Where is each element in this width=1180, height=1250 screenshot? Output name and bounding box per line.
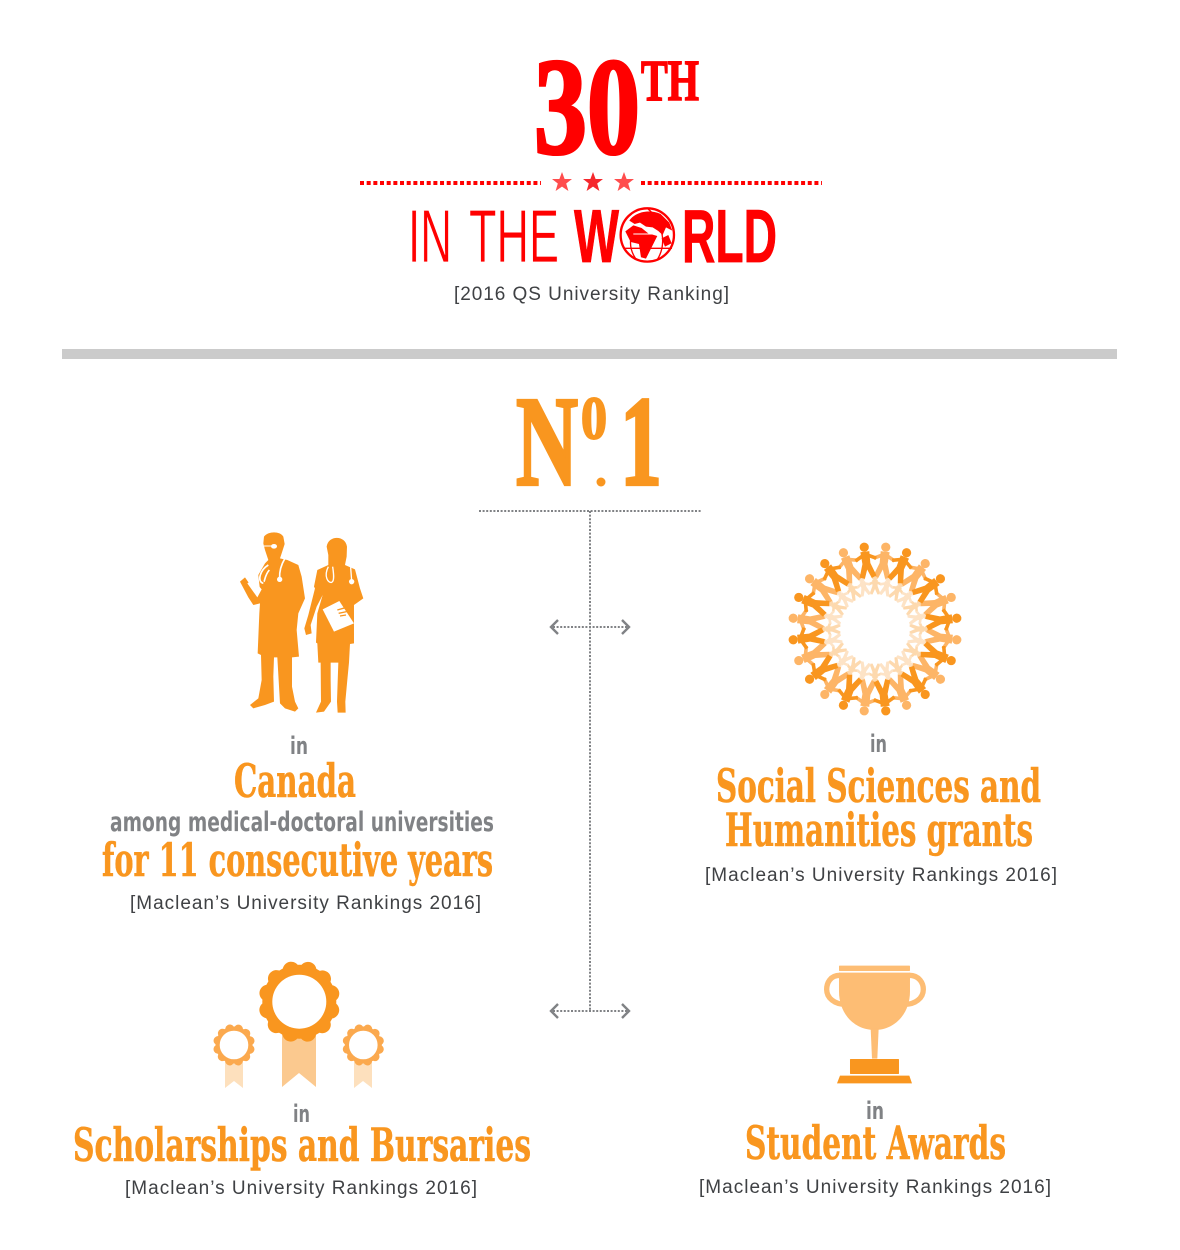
heading: Canada: Canada	[234, 754, 356, 808]
source note: [Maclean’s University Rankings 2016]	[125, 1178, 477, 1199]
heading: IN: IN	[408, 194, 452, 278]
source note: [Maclean’s University Rankings 2016]	[699, 1177, 1051, 1198]
icon: medals	[214, 962, 384, 1088]
panel: Scholarships and Bursaries	[73, 962, 531, 1199]
icon: doctors	[240, 532, 363, 713]
superscript: TH: TH	[641, 48, 699, 113]
panel: Canada medical-doctoral	[102, 532, 494, 914]
source note: [Maclean’s University Rankings 2016]	[130, 893, 481, 914]
label: in: in	[870, 730, 887, 758]
heading: 30: 30	[534, 30, 640, 183]
heading: THE: THE	[469, 194, 559, 278]
source note: QS ranking: [2016 QS University Ranking]	[454, 284, 729, 305]
text: among medical-doctoral universities: among medical-doctoral universities	[110, 807, 494, 838]
heading: No. 1: 0	[581, 386, 607, 452]
label: in: in	[293, 1100, 310, 1128]
section: 30th in the world	[360, 30, 822, 305]
heading: No. 1: 1	[620, 370, 662, 512]
icon: trophy	[827, 966, 923, 1083]
panel: Social Sciences and Humanities grants	[705, 541, 1057, 886]
heading: No. 1	[516, 370, 662, 512]
divider bar	[62, 349, 1117, 359]
heading: for 11 consecutive years: for 11 consecutive years	[102, 833, 493, 887]
heading: W: W	[574, 194, 619, 278]
icon: ring of people	[787, 541, 963, 717]
panel: Student Awards	[699, 966, 1051, 1198]
source note: [Maclean’s University Rankings 2016]	[705, 865, 1057, 886]
connector: dotted lines and arrows	[479, 511, 701, 1018]
heading: No. 1: N	[516, 370, 578, 512]
divider: dotted line with stars	[360, 172, 822, 191]
heading: Scholarships and Bursaries: Scholarships and Bursaries	[73, 1118, 531, 1172]
heading: Student Awards: Student Awards	[745, 1116, 1006, 1170]
label: in: in	[866, 1097, 884, 1125]
label: in: in	[290, 732, 308, 760]
icon: globe	[621, 208, 674, 262]
heading: RLD: RLD	[682, 194, 777, 278]
